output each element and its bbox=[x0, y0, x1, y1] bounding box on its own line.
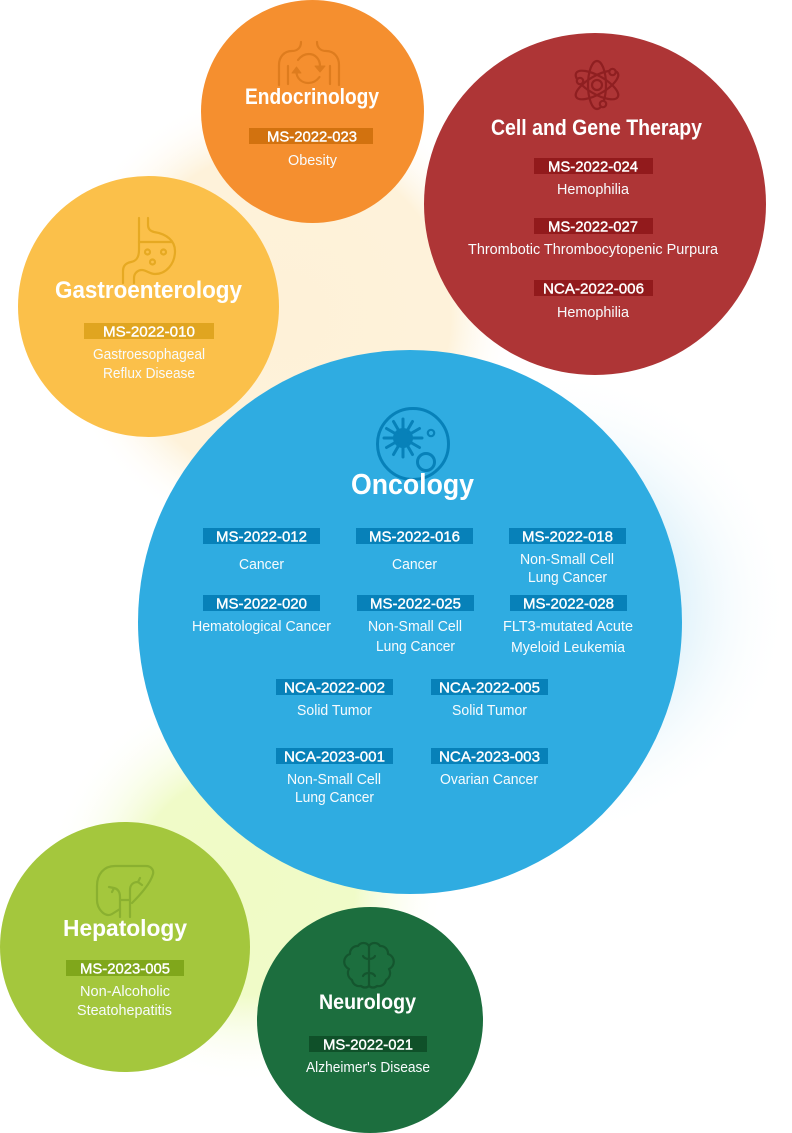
heading: hepatology: Hepatology bbox=[63, 915, 187, 941]
label: non-alcoholic steatohepatitis: Non-Alcoholic bbox=[80, 984, 170, 1000]
trial: NCA-2022-002 bbox=[276, 679, 393, 719]
code: MS-2022-027: MS-2022-027 bbox=[548, 218, 638, 236]
trial: MS-2022-025: Lung Cancer bbox=[376, 639, 455, 655]
panel: endocrinology bbox=[201, 0, 424, 223]
heading: oncology: Oncology bbox=[351, 469, 474, 501]
panel: cell and gene therapy bbox=[424, 33, 766, 375]
trial: NCA-2023-001: Lung Cancer bbox=[295, 790, 374, 806]
trial: NCA-2022-005 bbox=[431, 679, 548, 719]
trial: MS-2022-025: MS-2022-025 bbox=[370, 596, 461, 612]
heading: gastroenterology: Gastroenterology bbox=[55, 277, 243, 304]
icon: cell bbox=[378, 408, 448, 480]
trial: MS-2022-012: Cancer bbox=[239, 557, 284, 573]
trial: MS-2022-028: FLT3-mutated Acute bbox=[503, 619, 633, 635]
trial: MS-2022-012: MS-2022-012 bbox=[216, 528, 307, 546]
trial: MS-2022-018 bbox=[509, 528, 626, 586]
heading: cell and gene therapy: Cell and Gene Therapy bbox=[491, 115, 703, 140]
code: MS-2022-023: MS-2022-023 bbox=[267, 128, 357, 146]
trial: NCA-2023-003 bbox=[431, 748, 548, 788]
trial: MS-2022-018: Non-Small Cell bbox=[520, 552, 614, 568]
trial: MS-2022-025: Non-Small Cell bbox=[368, 619, 462, 635]
background glow: blue bbox=[320, 370, 790, 840]
label: hemophilia: Hemophilia bbox=[557, 305, 630, 321]
trial: NCA-2023-001: Non-Small Cell bbox=[287, 772, 381, 788]
label: TTP: Thrombotic Thrombocytopenic Purpura bbox=[468, 242, 719, 258]
background glow: yellow bbox=[55, 85, 515, 545]
trial: MS-2022-028: MS-2022-028 bbox=[523, 596, 614, 612]
trial: MS-2022-016: Cancer bbox=[392, 557, 437, 573]
panel: oncology bbox=[138, 350, 682, 894]
trial: NCA-2023-003: NCA-2023-003 bbox=[439, 748, 540, 766]
trial: MS-2022-020 bbox=[192, 595, 331, 635]
icon: brain bbox=[344, 943, 394, 988]
label: obesity: Obesity bbox=[288, 153, 338, 169]
label: gastroesophageal reflux disease: Reflux Disease bbox=[103, 366, 195, 382]
trial: MS-2022-016 bbox=[356, 528, 473, 573]
icon: atom bbox=[572, 61, 622, 109]
code: MS-2022-010 bbox=[84, 323, 214, 340]
icon: stomach bbox=[123, 218, 175, 283]
trial: MS-2022-018: Lung Cancer bbox=[528, 570, 607, 586]
trial: MS-2022-028 bbox=[503, 595, 633, 656]
icon: liver bbox=[97, 866, 153, 917]
trial: MS-2022-018: MS-2022-018 bbox=[522, 528, 613, 546]
icon: endocrine body bbox=[279, 42, 339, 85]
trial: NCA-2022-005: Solid Tumor bbox=[452, 703, 527, 719]
trial: MS-2022-020: MS-2022-020 bbox=[216, 596, 307, 612]
trial: NCA-2022-002: NCA-2022-002 bbox=[284, 680, 385, 696]
trial: MS-2022-012 bbox=[203, 528, 320, 573]
panel: hepatology bbox=[0, 822, 250, 1072]
panel: neurology bbox=[257, 907, 483, 1133]
panel: gastroenterology bbox=[18, 176, 279, 437]
trial: MS-2022-025 bbox=[357, 595, 474, 655]
trial: MS-2022-016: MS-2022-016 bbox=[369, 528, 460, 546]
trial: NCA-2023-001: NCA-2023-001 bbox=[284, 748, 385, 766]
heading: endocrinology: Endocrinology bbox=[245, 84, 380, 109]
background glow: green bbox=[45, 685, 445, 1085]
label: hemophilia: Hemophilia bbox=[557, 182, 630, 198]
heading: neurology: Neurology bbox=[319, 991, 416, 1014]
label: non-alcoholic steatohepatitis bbox=[77, 984, 172, 1019]
label: gastroesophageal reflux disease: Gastroesophageal bbox=[93, 347, 205, 363]
label: alzheimer's disease: Alzheimer's Disease bbox=[306, 1060, 430, 1076]
trial: NCA-2022-005: NCA-2022-005 bbox=[439, 680, 540, 696]
trial: NCA-2022-002: Solid Tumor bbox=[297, 703, 372, 719]
trial: MS-2022-020: Hematological Cancer bbox=[192, 619, 331, 635]
label: gastroesophageal reflux disease bbox=[93, 347, 205, 382]
code: MS-2022-021: MS-2022-021 bbox=[323, 1036, 413, 1054]
trial: MS-2022-028: Myeloid Leukemia bbox=[511, 640, 626, 656]
code: NCA-2022-006: NCA-2022-006 bbox=[543, 280, 644, 298]
code: MS-2022-010: MS-2022-010 bbox=[103, 324, 195, 340]
label: non-alcoholic steatohepatitis: Steatohepatitis bbox=[77, 1003, 172, 1019]
trial: NCA-2023-003: Ovarian Cancer bbox=[440, 772, 538, 788]
trial: NCA-2023-001 bbox=[276, 748, 393, 806]
code: MS-2023-005: MS-2023-005 bbox=[80, 960, 170, 978]
code: MS-2022-024: MS-2022-024 bbox=[548, 158, 638, 176]
